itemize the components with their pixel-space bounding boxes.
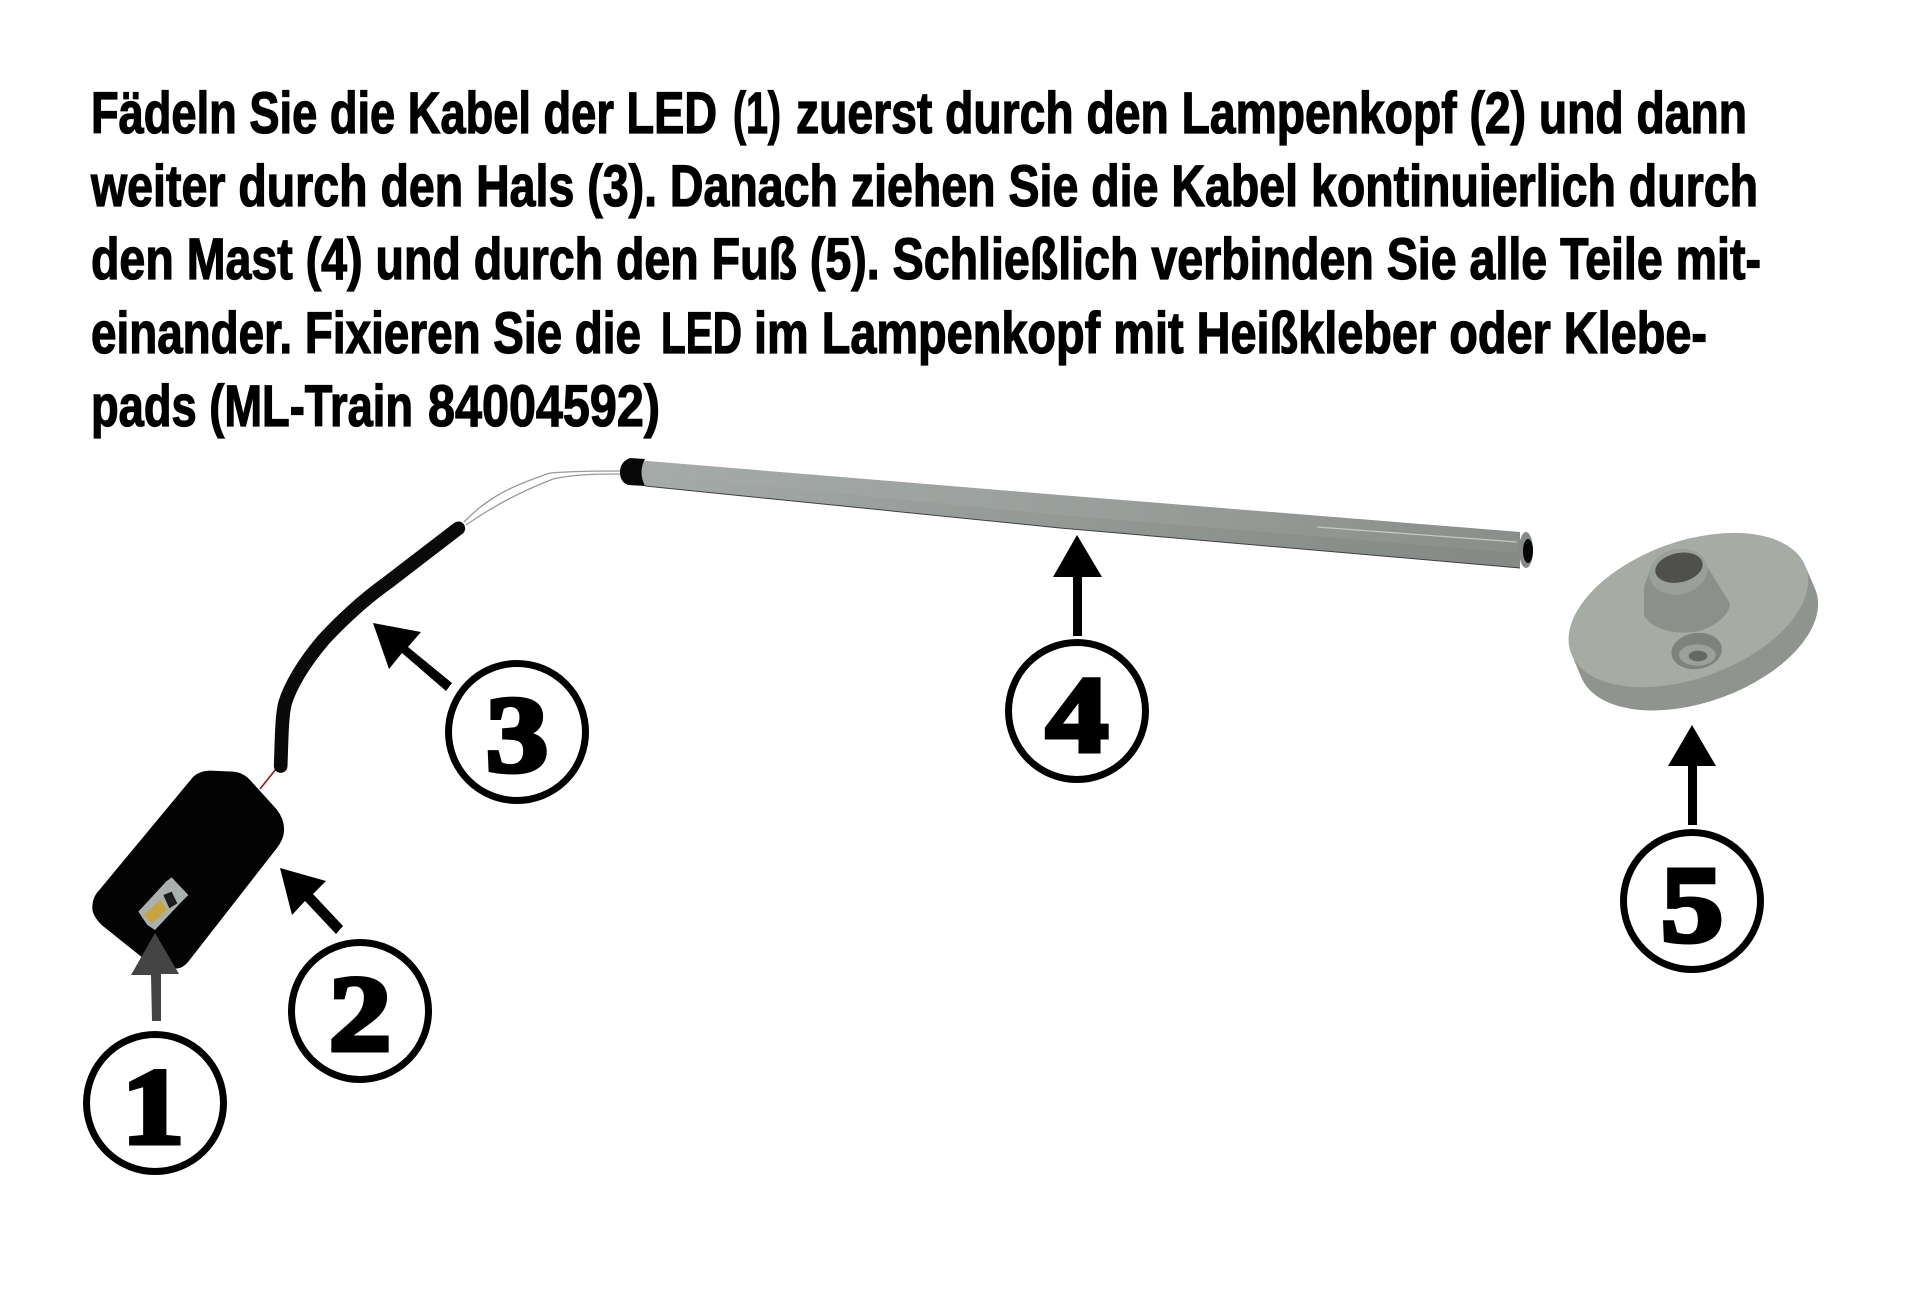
arrow 4 xyxy=(1053,535,1102,636)
badge 4 xyxy=(1008,642,1146,780)
arrow 3 xyxy=(373,623,452,691)
instruction text: im Lampenkopf mit Heißkleber oder Klebe- xyxy=(754,301,1707,366)
part 3: neck tube with wires xyxy=(260,471,620,789)
arrow 2 xyxy=(280,868,343,934)
badge 4: 4 xyxy=(1046,655,1108,775)
part 1-2: lamp head with LED xyxy=(92,771,284,969)
badge 5: 5 xyxy=(1661,845,1723,965)
arrow 5 xyxy=(1668,725,1716,825)
foot recess xyxy=(1669,630,1724,672)
badge 3 xyxy=(448,664,586,800)
instruction text: 84004592) xyxy=(428,374,660,439)
part 5: foot xyxy=(1547,503,1839,740)
arrow 1 xyxy=(131,933,179,1021)
badge 3: 3 xyxy=(486,675,548,795)
instruction text: (1) xyxy=(733,81,781,146)
foot post xyxy=(1644,568,1730,633)
instruction text xyxy=(90,81,1761,439)
badge 1: 1 xyxy=(122,1047,184,1167)
instruction text: Fädeln Sie die Kabel der LED xyxy=(91,81,717,146)
instruction text: einander. Fixieren Sie die xyxy=(91,301,641,366)
instruction text: pads (ML-Train xyxy=(91,374,413,439)
badge 2 xyxy=(292,942,428,1080)
badge 2: 2 xyxy=(329,954,391,1074)
part 4: mast tube xyxy=(620,458,1533,568)
LED xyxy=(138,877,188,930)
badge 5 xyxy=(1624,832,1760,970)
badge 1 xyxy=(86,1034,224,1172)
instruction text: LED xyxy=(661,301,742,366)
